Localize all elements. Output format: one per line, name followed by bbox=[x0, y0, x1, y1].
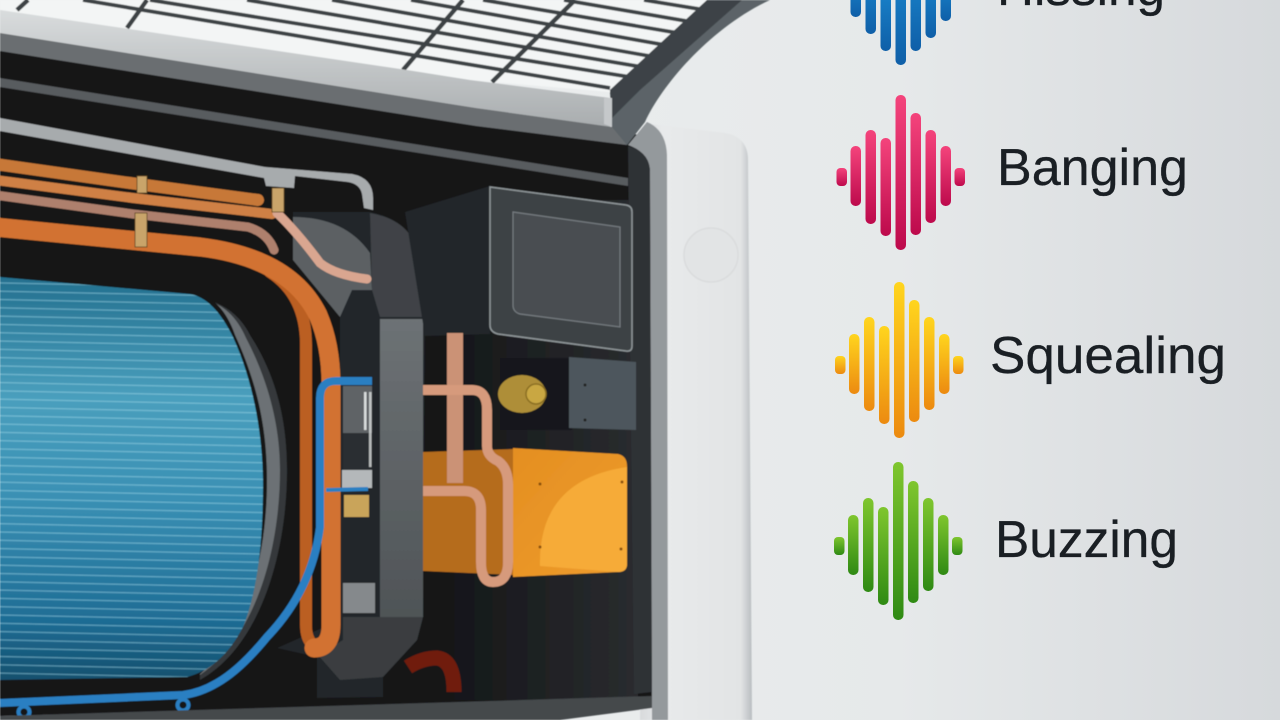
inner side wall bbox=[628, 146, 652, 694]
light panel bbox=[380, 319, 423, 617]
label: Banging: Banging bbox=[997, 139, 1188, 197]
blower housing bbox=[277, 212, 425, 698]
control box bbox=[405, 186, 632, 351]
blower fan drum bbox=[0, 277, 287, 680]
orange capacitor box bbox=[423, 448, 627, 577]
lower duct bbox=[318, 617, 423, 680]
vent marks bbox=[364, 392, 372, 467]
inner shelf strip bbox=[0, 78, 628, 186]
small junction box bbox=[500, 357, 636, 430]
copper pipes right bbox=[423, 333, 508, 582]
top hood bbox=[610, 0, 770, 145]
legend: Squealing bbox=[835, 282, 1226, 438]
drum fins bbox=[0, 277, 263, 680]
waveform: green bbox=[834, 462, 962, 620]
rivets bbox=[538, 480, 624, 550]
blower outer shoulder bbox=[370, 213, 425, 317]
outer white housing bbox=[640, 124, 752, 720]
brass valve bbox=[498, 375, 546, 413]
interior shading bbox=[423, 200, 638, 700]
label: Buzzing: Buzzing bbox=[995, 511, 1178, 569]
label: Squealing: Squealing bbox=[990, 327, 1226, 385]
waveform: blue bbox=[836, 0, 965, 65]
red pipe bbox=[408, 658, 454, 692]
grille slats bbox=[0, 0, 707, 92]
blue tube bbox=[0, 381, 372, 718]
waveform: pink bbox=[836, 95, 965, 250]
top grille bbox=[0, 0, 707, 92]
grille lines bbox=[17, 0, 705, 88]
inner panel bbox=[513, 212, 620, 327]
waveform: amber bbox=[835, 282, 964, 438]
legend: Banging bbox=[836, 95, 1188, 250]
control components bbox=[342, 386, 375, 613]
air conditioner cutaway illustration bbox=[0, 0, 770, 720]
dark interior bbox=[0, 45, 652, 716]
pipe clamps bbox=[135, 176, 284, 247]
blower inner curve bbox=[293, 217, 372, 317]
drum ring bbox=[200, 298, 287, 680]
legend: Buzzing bbox=[834, 462, 1178, 620]
legend: Hissing bbox=[836, 0, 1165, 65]
copper pipes left bbox=[0, 164, 367, 648]
inner frame bbox=[628, 122, 668, 720]
floor strip bbox=[0, 696, 652, 720]
front beam bbox=[0, 10, 627, 145]
lower bracket bbox=[0, 118, 373, 210]
drum body bbox=[0, 277, 263, 680]
housing round emboss bbox=[684, 228, 738, 282]
